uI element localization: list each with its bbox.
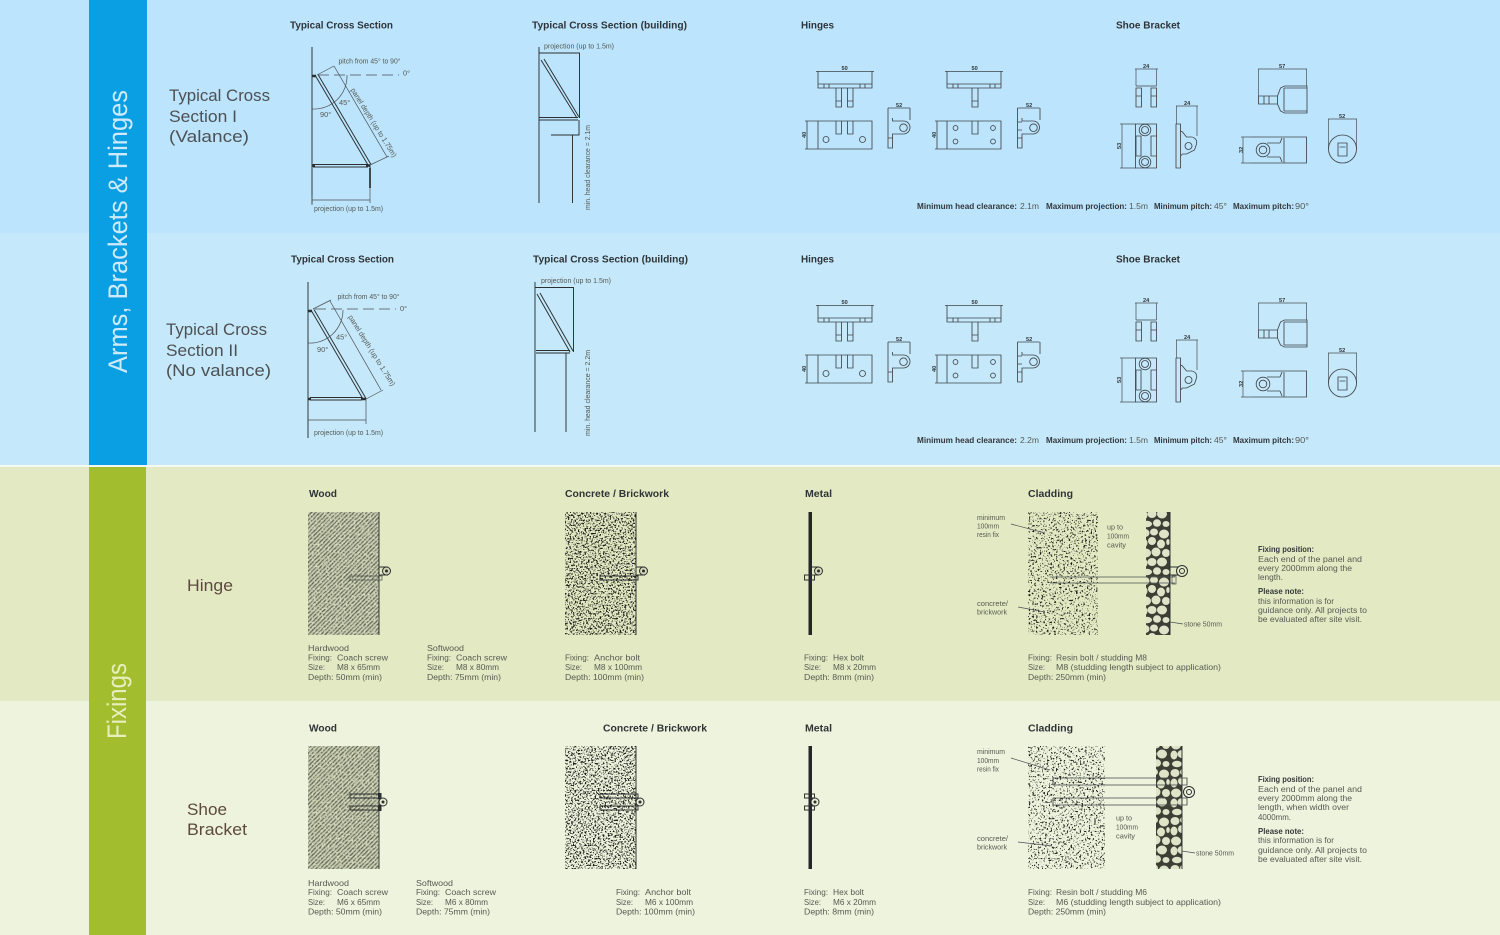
note: fixing position: be evaluated after site visit. [1258,854,1362,864]
text: softwood spec: Coach screw [456,652,508,662]
diagram: shoe bracket: 32 [1239,381,1245,387]
note: fixing position: guidance only. All projects to [1258,605,1367,615]
section label: (No valance) [166,361,271,380]
heading: cross section: Typical Cross Section [291,254,394,266]
text: metal spec: Size: [804,897,821,907]
text: concrete spec [565,652,644,682]
text: metal spec: M6 x 20mm [833,897,876,907]
text: softwood spec: Fixing: [427,652,451,662]
text: hardwood spec: Hardwood [308,643,349,653]
specification line: 1.5m [1129,201,1148,211]
diagram: cross section valance: projection (up to 1.5m) [314,204,383,213]
heading: concrete: Concrete / Brickwork [603,724,707,734]
diagram: hinges [802,300,1040,383]
text: cladding spec: Fixing: [1028,652,1052,662]
text: softwood spec: Depth: 75mm (min) [416,906,490,916]
diagram: concrete shoe fixing [565,746,644,869]
diagram: shoe bracket: 53 [1117,377,1123,383]
text: concrete spec [616,887,695,916]
panel: shoe bracket fixings [187,724,1367,916]
diagram: cross section valance: panel depth (up to 1.75m) [349,86,399,159]
diagram: building section no valance: min. head clearance = 2.2m [583,350,592,436]
text: cladding spec: Fixing: [1028,887,1052,897]
diagram: cladding shoe fixing: minimum [977,747,1005,756]
diagram: cross section no valance: 0° [400,304,407,313]
note: fixing position: every 2000mm along the [1258,563,1352,573]
diagram: concrete hinge fixing [565,512,648,635]
diagram: cross section no valance: projection (up to 1.5m) [314,428,383,437]
note: fixing position: guidance only. All projects to [1258,845,1367,855]
text: concrete spec: Size: [616,897,633,907]
note: fixing position: length, when width over [1258,802,1349,812]
diagram: cladding shoe fixing: up to [1116,814,1132,822]
diagram: shoe bracket: 52 [1339,114,1345,120]
diagram: cladding hinge fixing: stone 50mm [1184,620,1222,628]
heading: cladding: Cladding [1028,724,1073,734]
note: fixing position: Please note: [1258,826,1304,836]
text: metal spec: Fixing: [804,887,828,897]
text: softwood spec [416,878,497,916]
diagram: hinges: 40 [932,132,938,138]
diagram: cladding shoe fixing: cavity [1116,832,1135,840]
diagram: shoe bracket: 32 [1239,147,1245,153]
specification line [917,435,1309,445]
text: softwood spec: M8 x 80mm [456,662,499,672]
diagram: cross section no valance: panel depth (up to 1.75m) [346,313,397,388]
diagram: hinges: 50 [972,66,978,72]
text: metal spec: Fixing: [804,652,828,662]
note: fixing position: this information is for [1258,835,1334,845]
text: hardwood spec: Size: [308,897,325,907]
text: concrete spec: Fixing: [565,652,589,662]
diagram: cladding hinge fixing: minimum [977,513,1005,522]
text: hardwood spec: Coach screw [337,652,389,662]
diagram: cladding hinge fixing: 100mm [1107,532,1129,540]
text: cladding spec: M6 (studding length subject to application) [1056,897,1221,907]
specification line: Minimum head clearance: [917,435,1017,445]
text: concrete spec: Anchor bolt [645,887,692,897]
text: hardwood spec: Fixing: [308,887,332,897]
heading: wood: Wood [309,489,337,500]
text: hardwood spec: M8 x 65mm [337,662,380,672]
diagram: metal shoe fixing [804,746,819,869]
specification line: 2.2m [1020,435,1039,445]
text: cladding spec: Resin bolt / studding M8 [1056,652,1147,662]
heading: wood: Wood [309,724,337,734]
diagram: shoe bracket: 24 [1143,64,1150,70]
text: concrete spec: M6 x 100mm [645,897,693,907]
diagram: hinges: 50 [842,300,848,306]
specification line: Maximum projection: [1046,201,1127,211]
section label: Section I [169,107,237,126]
specification line: 45° [1214,201,1227,211]
text: softwood spec: Softwood [427,643,464,653]
specification line: 90° [1295,435,1309,445]
text: metal spec: Size: [804,662,821,672]
diagram: cladding hinge fixing: up to [1107,522,1123,532]
diagram: hinges: 40 [932,366,938,372]
text: hardwood spec: Depth: 50mm (min) [308,906,382,916]
text: hardwood spec: Coach screw [337,887,389,897]
heading: cross section: Typical Cross Section [290,20,393,32]
diagram: cladding hinge fixing: resin fix [977,530,999,539]
text: cladding spec: M8 (studding length subject to application) [1056,662,1221,672]
text: concrete spec: Anchor bolt [594,652,641,662]
diagram: cross section no valance: 90° [317,345,328,354]
diagram: cross section valance: 45° [339,98,350,107]
section label: Bracket [187,820,247,839]
specification line: 1.5m [1129,435,1148,445]
diagram: hinges: 52 [896,337,902,343]
text: hardwood spec: M6 x 65mm [337,897,380,907]
note: fixing position: Each end of the panel and [1258,554,1362,564]
text: hardwood spec: Size: [308,662,325,672]
note: fixing position: every 2000mm along the [1258,793,1352,803]
text: concrete spec: Depth: 100mm (min) [565,672,644,682]
text: softwood spec: Coach screw [445,887,497,897]
text: softwood spec: Fixing: [416,887,440,897]
panel: typical cross section I [169,20,1357,213]
diagram: shoe bracket [1117,64,1357,168]
diagram: cladding hinge fixing: brickwork [977,608,1007,616]
heading: arms brackets hinges: Arms, Brackets & Hinges [103,90,133,373]
diagram: hinges: 52 [1026,103,1032,109]
text: concrete spec: Size: [565,662,582,672]
section label [169,86,270,146]
section label: Section II [166,341,238,360]
specification line: Maximum pitch: [1233,201,1294,211]
diagram: cross section valance: 0° [403,68,410,78]
diagram: cladding shoe fixing: 100mm [977,756,999,765]
note: fixing position: Fixing position: [1258,544,1314,554]
section label: Hinge [187,576,233,595]
note: fixing position: Each end of the panel and [1258,784,1362,794]
text: cladding spec: Depth: 250mm (min) [1028,906,1106,916]
diagram: shoe bracket [1117,298,1357,402]
specification line: 2.1m [1020,201,1039,211]
note: fixing position: Fixing position: [1258,774,1314,784]
heading: shoe bracket: Shoe Bracket [1116,254,1181,266]
heading: hinges: Hinges [801,20,834,32]
specification line: 45° [1214,435,1227,445]
heading: building section: Typical Cross Section (building) [533,254,688,266]
diagram: cross section valance [312,47,410,213]
text: cladding spec: Resin bolt / studding M6 [1056,887,1147,897]
diagram: shoe bracket: 52 [1339,348,1345,354]
text: metal spec: Hex bolt [833,887,865,897]
diagram: cladding shoe fixing: resin fix [977,764,999,774]
diagram: cladding shoe fixing: brickwork [977,842,1007,852]
text: concrete spec: Depth: 100mm (min) [616,906,695,916]
diagram: building section no valance: projection (up to 1.5m) [541,276,611,285]
section label: Typical Cross [166,320,267,339]
text: metal spec [804,652,876,682]
specification line: 90° [1295,201,1309,211]
text: softwood spec: Size: [427,662,444,672]
section label: (Valance) [169,127,249,146]
text: hardwood spec [308,878,389,916]
diagram: hinges: 40 [802,366,808,372]
diagram: cross section valance: pitch from 45° to 90° [338,56,401,66]
section label: Typical Cross [169,86,270,105]
diagram: building section valance [539,42,614,210]
diagram: cladding shoe fixing: stone 50mm [1196,848,1234,858]
diagram: hinges [802,66,1040,149]
text: hardwood spec: Fixing: [308,652,332,662]
panel: blue side band [89,0,147,465]
text: metal spec [804,887,876,916]
note: fixing position: 4000mm. [1258,812,1291,822]
section label [187,800,247,839]
diagram: building section valance: min. head clearance = 2.1m [583,125,592,210]
specification line: Maximum pitch: [1233,435,1294,445]
panel: hinge fixings [187,489,1367,682]
diagram: cladding shoe fixing: concrete/ [977,834,1009,843]
panel: green side band [89,467,146,935]
specification line: Minimum head clearance: [917,201,1017,211]
specification line [917,201,1309,211]
diagram: shoe bracket: 24 [1143,298,1150,304]
text: softwood spec: Size: [416,897,433,907]
heading: hinges: Hinges [801,254,834,266]
text: cladding spec [1028,887,1221,916]
diagram: building section no valance [535,276,611,436]
heading: concrete: Concrete / Brickwork [565,489,669,500]
diagram: cross section valance: 90° [320,110,331,119]
diagram: cross section no valance: 45° [336,332,347,342]
note: fixing position [1258,544,1367,624]
diagram: cladding shoe fixing [977,746,1234,869]
text: metal spec: Depth: 8mm (min) [804,906,874,916]
text: metal spec: Depth: 8mm (min) [804,672,874,682]
heading: building section: Typical Cross Section (building) [532,20,687,32]
text: concrete spec: M8 x 100mm [594,662,642,672]
diagram: cladding shoe fixing: 100mm [1116,822,1138,832]
diagram: cross section no valance: pitch from 45° to 90° [338,292,400,301]
text: cladding spec [1028,652,1221,682]
heading: fixings: Fixings [102,663,132,739]
diagram: cross section no valance [308,282,407,438]
diagram: hinges: 50 [972,300,978,306]
note: fixing position: this information is for [1258,596,1334,606]
section label: Shoe [187,800,227,819]
heading: metal: Metal [805,489,832,500]
panel: typical cross section II [166,254,1357,445]
diagram: wood hinge fixing [308,512,390,635]
section label [166,320,271,380]
text: softwood spec [427,643,508,682]
diagram: metal hinge fixing [804,512,822,635]
diagram: shoe bracket: 24 [1184,335,1191,341]
specification line: Minimum pitch: [1154,201,1212,211]
heading: cladding: Cladding [1028,489,1073,500]
text: metal spec: M8 x 20mm [833,662,876,672]
note: fixing position: length. [1258,572,1283,582]
diagram: hinges: 40 [802,132,808,138]
diagram: hinges: 52 [1026,337,1032,343]
diagram: shoe bracket: 24 [1184,101,1191,107]
text: cladding spec: Size: [1028,662,1045,672]
diagram: building section valance: projection (up to 1.5m) [544,42,614,50]
text: hardwood spec [308,643,389,682]
diagram: shoe bracket: 57 [1279,298,1285,304]
diagram: hinges: 52 [896,103,902,109]
text: hardwood spec: Depth: 50mm (min) [308,672,382,682]
specification line: Minimum pitch: [1154,435,1212,445]
text: cladding spec: Depth: 250mm (min) [1028,672,1106,682]
text: metal spec: Hex bolt [833,652,865,662]
diagram: shoe bracket: 53 [1117,143,1123,149]
specification line: Maximum projection: [1046,435,1127,445]
text: hardwood spec: Hardwood [308,878,349,888]
heading: metal: Metal [805,724,832,734]
diagram: cladding hinge fixing: concrete/ [977,599,1009,608]
note: fixing position: Please note: [1258,586,1304,596]
note: fixing position: be evaluated after site visit. [1258,614,1362,624]
text: concrete spec: Fixing: [616,887,640,897]
note: fixing position [1258,774,1367,864]
text: softwood spec: Depth: 75mm (min) [427,672,501,682]
text: softwood spec: Softwood [416,878,453,888]
heading: shoe bracket: Shoe Bracket [1116,20,1181,32]
diagram: hinges: 50 [842,66,848,72]
text: softwood spec: M6 x 80mm [445,897,488,907]
diagram: cladding hinge fixing [977,512,1222,635]
diagram: cladding hinge fixing: cavity [1107,540,1126,550]
diagram: cladding hinge fixing: 100mm [977,522,999,530]
diagram: shoe bracket: 57 [1279,64,1285,70]
diagram: wood shoe fixing [308,746,387,869]
text: cladding spec: Size: [1028,897,1045,907]
